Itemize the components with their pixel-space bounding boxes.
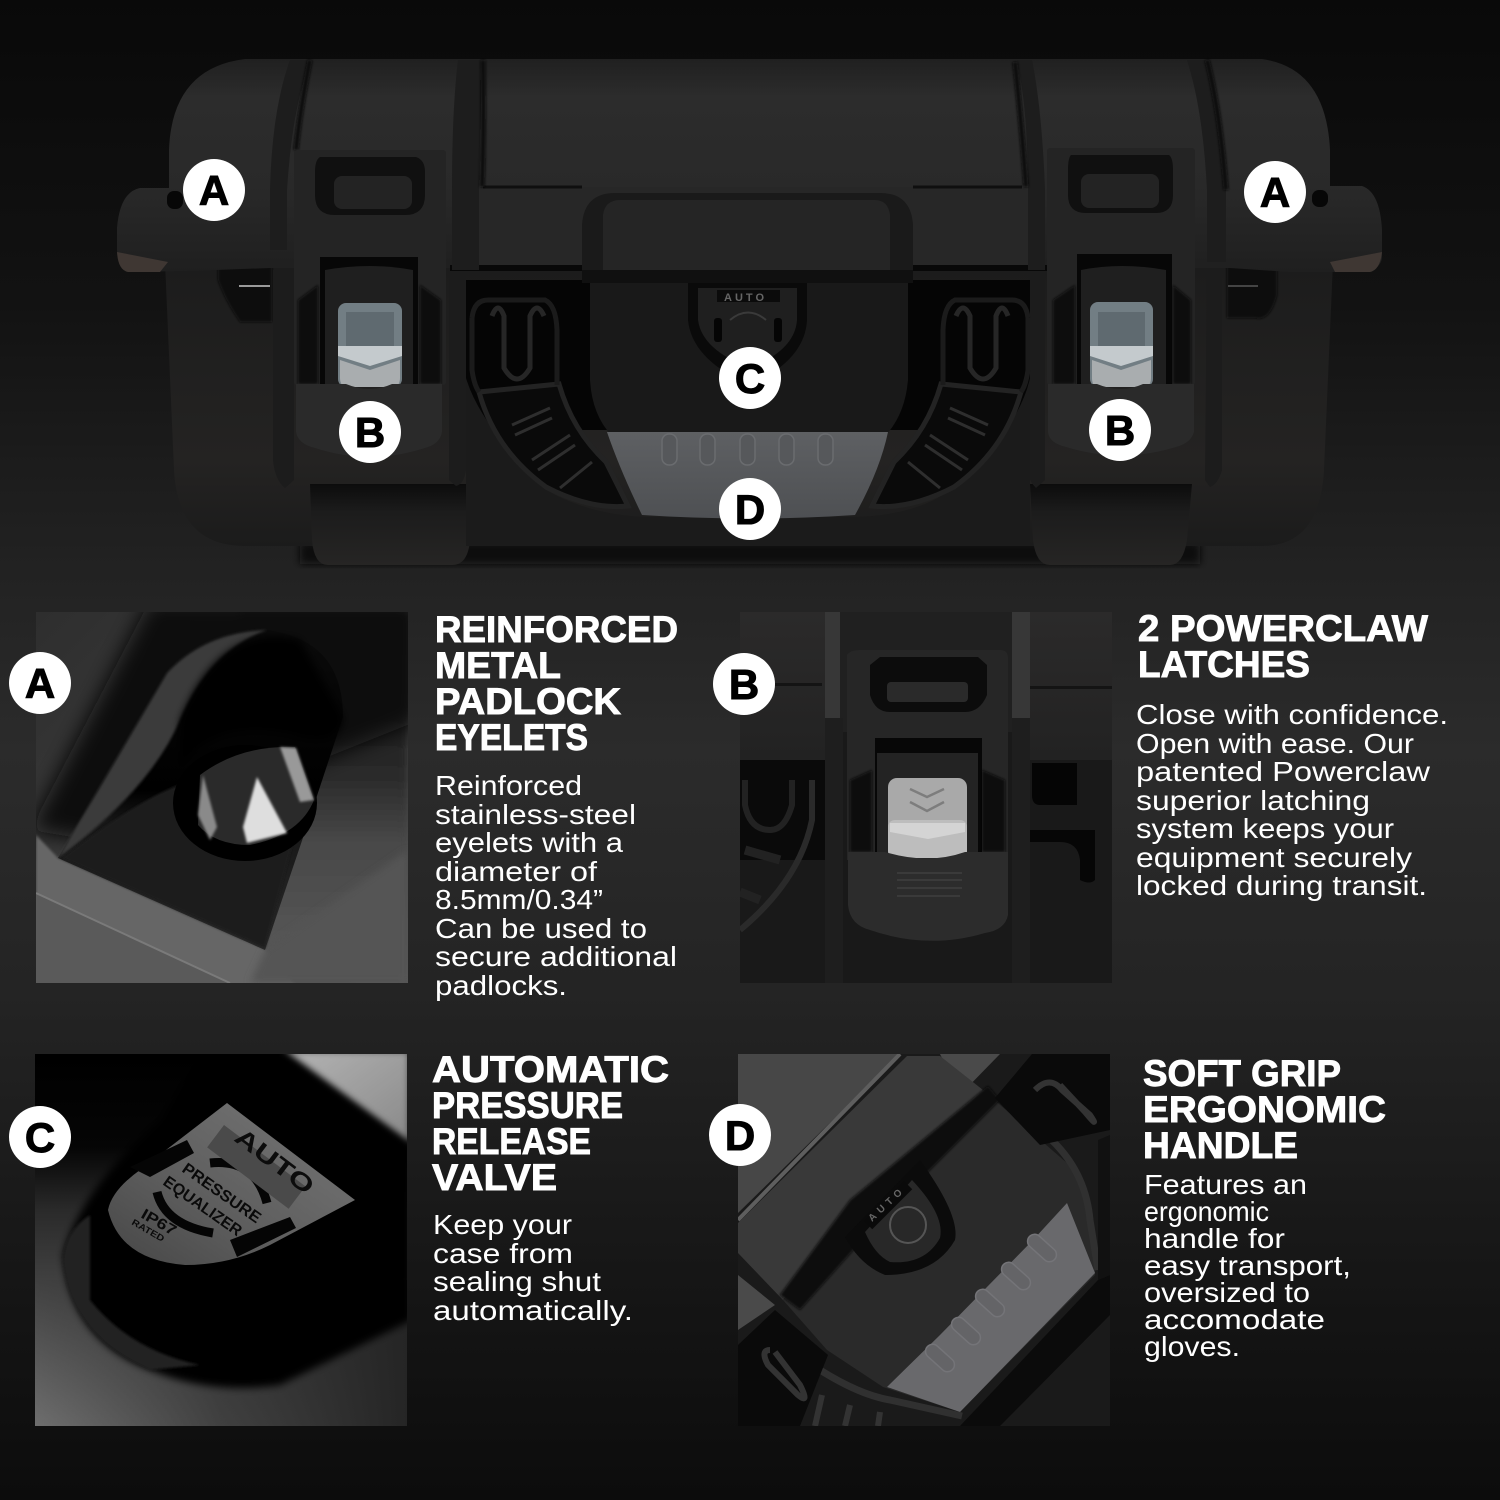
text D [1144, 1169, 1351, 1362]
text B: superior latching [1136, 785, 1370, 816]
text A: stainless-steel [435, 799, 636, 830]
heading A: PADLOCK [435, 681, 621, 722]
central recess [466, 280, 1030, 430]
left latch [294, 150, 446, 457]
heading B [1138, 608, 1428, 685]
case lower body [165, 262, 1333, 546]
heading D [1143, 1053, 1386, 1166]
text D: gloves. [1144, 1331, 1240, 1362]
panel D photo: handle angled [738, 1054, 1110, 1426]
text A: Reinforced [435, 770, 582, 801]
eyelet metal [173, 776, 317, 861]
lid lower step [460, 187, 1040, 268]
heading A: REINFORCED [435, 609, 678, 650]
marker B panel: B [729, 661, 759, 708]
handle arm right [872, 300, 1028, 507]
text A [435, 770, 677, 1001]
handle arm left [472, 300, 628, 507]
text C: case from [433, 1238, 573, 1269]
text B [1136, 699, 1448, 901]
marker D top [719, 478, 781, 540]
panel C photo: pressure valve: AUTO [229, 1123, 319, 1200]
panel A photo: padlock eyelet [30, 600, 420, 990]
valve [853, 1171, 956, 1275]
case lid [117, 59, 1382, 272]
heading D: SOFT GRIP [1143, 1053, 1341, 1094]
text D: accomodate [1144, 1304, 1325, 1335]
text C [433, 1209, 633, 1326]
marker A right: A [1260, 169, 1290, 216]
text D: Features an [1144, 1169, 1307, 1200]
marker A left [183, 159, 245, 221]
feet [310, 484, 476, 565]
panel C photo: pressure valve: PRESSURE [179, 1160, 264, 1227]
heading B: LATCHES [1138, 644, 1310, 685]
heading C: RELEASE [432, 1121, 591, 1162]
text C: Keep your [433, 1209, 572, 1240]
marker B left [339, 401, 401, 463]
pressure valve [688, 283, 807, 385]
heading A [435, 609, 678, 758]
marker B panel [713, 653, 775, 715]
lower tab [848, 852, 1008, 941]
marker B left: B [355, 409, 385, 456]
text B: Open with ease. Our [1136, 728, 1414, 759]
panel C photo: pressure valve [35, 1050, 412, 1426]
marker B right: B [1105, 407, 1135, 454]
panel B photo: latch [740, 612, 1112, 983]
side straps [273, 270, 1222, 488]
text D: easy transport, [1144, 1250, 1351, 1281]
text B: locked during transit. [1136, 870, 1427, 901]
eyelet recess [58, 734, 336, 950]
text A: Can be used to [435, 913, 647, 944]
arms and loops [820, 1130, 1098, 1416]
marker D panel [709, 1104, 771, 1166]
panel D photo: handle angled: AUTO [867, 1187, 905, 1224]
marker B right [1089, 399, 1151, 461]
marker C top: C [735, 355, 765, 402]
marker A panel: A [25, 660, 55, 707]
hinge loops and arm [745, 780, 792, 830]
marker D top: D [735, 486, 765, 533]
hinge gaps [218, 262, 272, 322]
heading C: AUTOMATIC [432, 1049, 669, 1090]
text B: system keeps your [1136, 813, 1394, 844]
heading A: EYELETS [435, 717, 588, 758]
panel C photo: pressure valve: EQUALIZER [160, 1173, 245, 1240]
product photo: case front view [117, 59, 1382, 565]
text C: sealing shut [433, 1266, 601, 1297]
metal slider [888, 778, 967, 826]
text B: Close with confidence. [1136, 699, 1448, 730]
panel C photo: pressure valve: IP67 [138, 1206, 179, 1239]
padlock eyelet holes [167, 190, 1328, 209]
valve face plate [108, 1103, 355, 1265]
heading D: ERGONOMIC [1143, 1089, 1386, 1130]
text B: patented Powerclaw [1136, 756, 1431, 787]
heading A: METAL [435, 645, 561, 686]
heading C: PRESSURE [432, 1085, 623, 1126]
soft grip [887, 1203, 1095, 1412]
marker A panel [9, 652, 71, 714]
marker C panel [9, 1106, 71, 1168]
text A: secure additional [435, 941, 677, 972]
heading D: HANDLE [1143, 1125, 1298, 1166]
text C: automatically. [433, 1295, 633, 1326]
marker A right [1244, 161, 1306, 223]
lid straps [270, 60, 1226, 270]
latch body [847, 732, 1008, 860]
panel C photo: pressure valve: RATED [130, 1217, 167, 1244]
soft grip handle [607, 432, 888, 518]
right cut-outs [1032, 763, 1077, 805]
marker D panel: D [725, 1112, 755, 1159]
text D: handle for [1144, 1223, 1285, 1254]
heading B: 2 POWERCLAW [1138, 608, 1428, 649]
text A: 8.5mm/0.34” [435, 884, 603, 915]
right latch [1047, 148, 1195, 456]
pressure valve: AUTO [724, 292, 764, 304]
text B: equipment securely [1136, 842, 1412, 873]
text A: eyelets with a [435, 827, 623, 858]
centre body [783, 1090, 1095, 1412]
vertical straps [825, 612, 1030, 720]
marker A left: A [199, 167, 229, 214]
lower front [466, 378, 1030, 546]
handle bar diagonal [738, 1056, 983, 1300]
text A: padlocks. [435, 970, 567, 1001]
heading C [432, 1049, 669, 1198]
text D: oversized to [1144, 1277, 1310, 1308]
front centre panel [590, 280, 908, 436]
top handle [582, 193, 913, 283]
marker C panel: C [25, 1114, 55, 1161]
marker C top [719, 347, 781, 409]
text A: diameter of [435, 856, 597, 887]
heading C: VALVE [432, 1157, 557, 1198]
text D: ergonomic [1144, 1196, 1269, 1227]
